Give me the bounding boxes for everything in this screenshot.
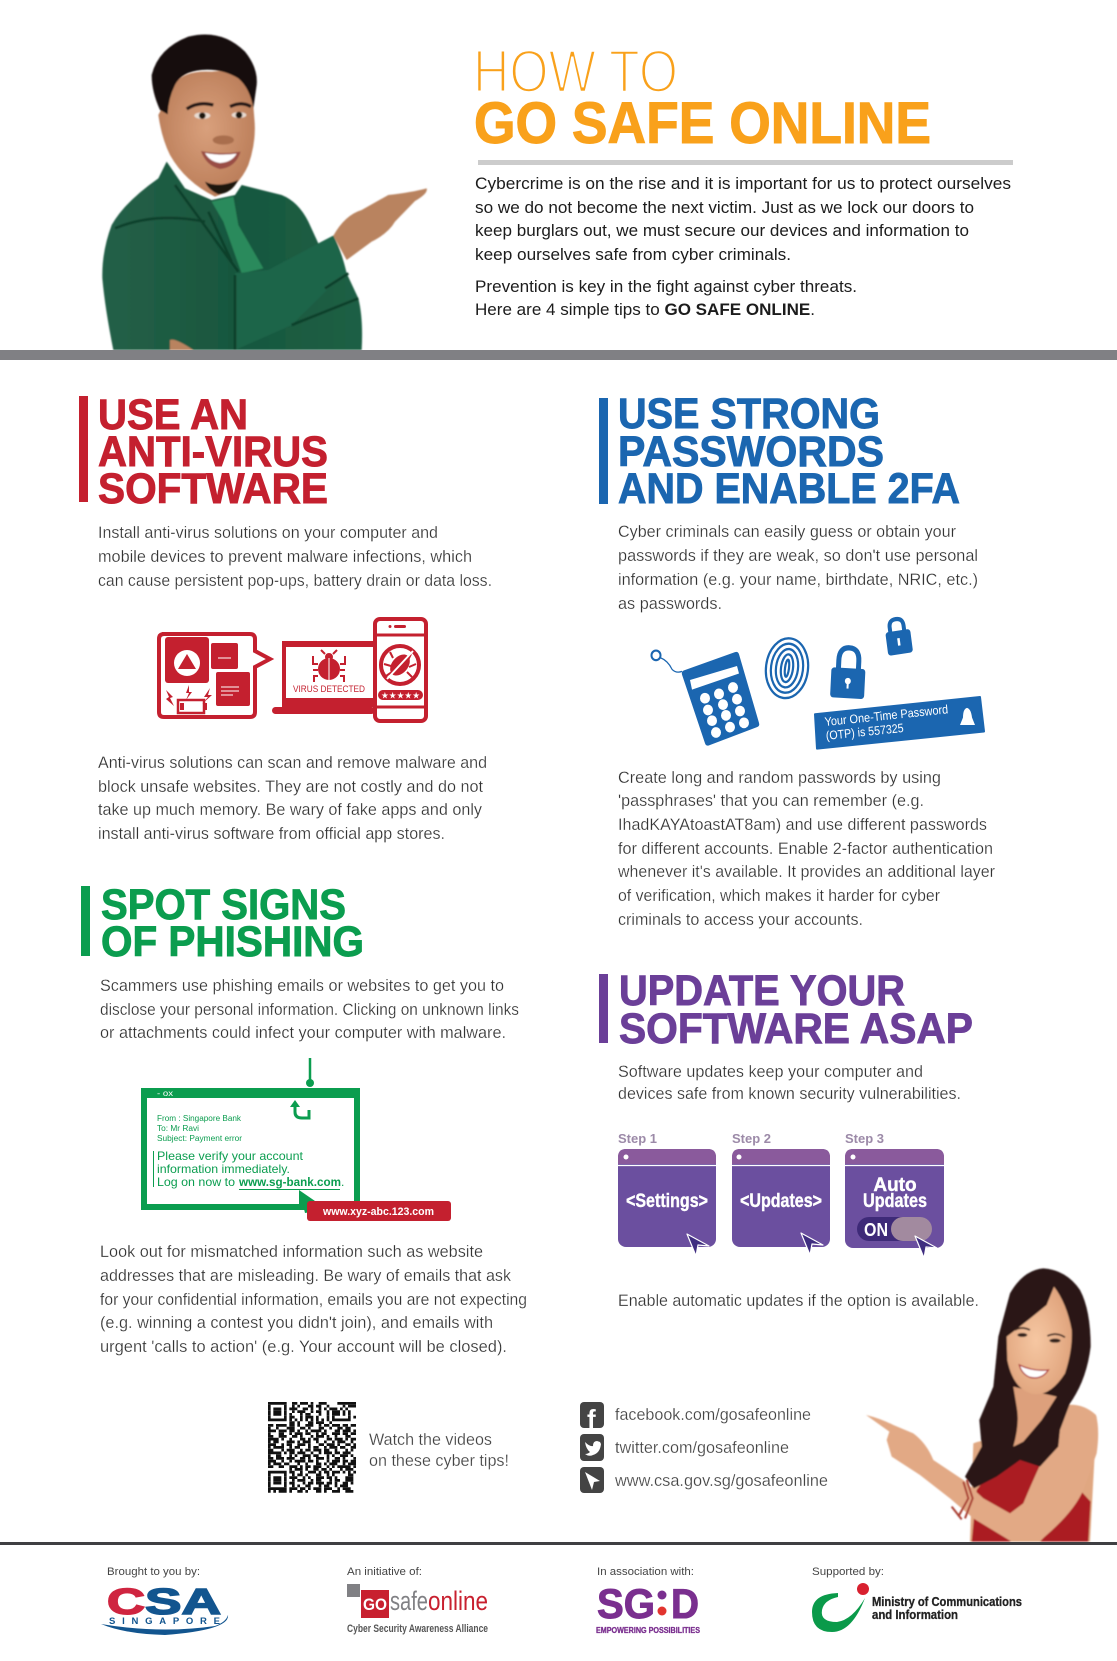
illustration: phishing email window: www.sg-bank.com <box>238 1175 341 1189</box>
footer logo: Ministry of Communications and Information <box>812 1566 1022 1632</box>
text: anti-virus details: take up much memory. Be wary of fake apps and only <box>98 801 483 819</box>
illustration: phishing email window <box>141 1058 451 1221</box>
text: anti-virus intro: Install anti-virus solutions on your computer and <box>98 524 438 542</box>
text: passwords intro: information (e.g. your name, birthdate, NRIC, etc.) <box>618 571 978 589</box>
illustration: phishing email window: To: Mr Ravi <box>157 1124 199 1133</box>
footer logo: CSA Singapore: SA <box>145 1581 221 1622</box>
text: update intro <box>618 1063 961 1103</box>
footer logo: SG:D: SG <box>597 1580 655 1627</box>
text: phishing details: addresses that are misleading. Be wary of emails that ask <box>100 1267 512 1285</box>
heading: use an anti-virus software: USE AN <box>98 391 248 439</box>
intro text: so we do not become the next victim. Just as we lock our doors to <box>475 199 974 217</box>
text: passwords details: whenever it's available. It provides an additional layer <box>617 863 995 881</box>
panel: anti-virus <box>79 391 492 843</box>
text: phishing intro <box>100 977 519 1042</box>
step 1 window: <Settings> <box>626 1191 708 1212</box>
text: social links <box>614 1406 828 1490</box>
heading: use strong passwords and enable 2FA: AND ENABLE 2FA <box>618 465 960 513</box>
title: HOW TO <box>473 38 678 105</box>
intro text: keep burglars out, we must secure our devices and information to <box>475 222 969 240</box>
icon: large padlock <box>830 647 866 699</box>
footer logo: CSA Singapore <box>101 1566 228 1635</box>
text: phishing intro: or attachments could infect your computer with malware. <box>100 1024 506 1042</box>
panel: update software <box>599 967 979 1310</box>
text: anti-virus details <box>98 754 487 843</box>
step 3 window with auto updates toggle <box>845 1131 944 1258</box>
heading: spot signs of phishing: OF PHISHING <box>101 918 364 966</box>
footer logo: SG:D: D <box>671 1580 699 1627</box>
footer logo: Ministry of Communications and Information: Ministry of Communications <box>872 1594 1022 1609</box>
step 2 window <box>732 1131 830 1255</box>
footer logo: Go Safe Online: Cyber Security Awareness Alliance <box>347 1623 488 1635</box>
illustration: phishing email window: Subject: Payment error <box>157 1134 242 1143</box>
footer logo: Go Safe Online: GO <box>363 1595 387 1614</box>
text: anti-virus details: install anti-virus software from official app stores. <box>98 825 445 843</box>
text: anti-virus details: block unsafe websites. They are not costly and do not <box>98 778 483 796</box>
text: update intro: devices safe from known security vulnerabilities. <box>618 1085 961 1103</box>
icon: one-time password message: (OTP) is 557325 <box>825 721 904 743</box>
footer logo: CSA Singapore: Brought to you by: <box>107 1566 200 1578</box>
text: phishing details: urgent 'calls to action' (e.g. Your account will be closed). <box>100 1338 507 1356</box>
icon: laptop virus detected: VIRUS DETECTED <box>293 684 365 694</box>
QR code <box>268 1403 356 1491</box>
callout: fake url: www.xyz-abc.123.com <box>322 1206 434 1218</box>
text: phishing intro: disclose your personal information. Clicking on unknown links <box>100 1001 519 1019</box>
text: phishing intro: Scammers use phishing emails or websites to get you to <box>100 977 504 995</box>
intro text: keep ourselves safe from cyber criminals. <box>475 246 791 264</box>
text: passwords details: criminals to access your accounts. <box>618 911 863 929</box>
icon: website cursor <box>580 1467 604 1493</box>
illustration: phishing email window: . <box>341 1175 344 1189</box>
illustration: phishing email window: - ox <box>157 1089 173 1098</box>
icon: malware symptoms speech bubble <box>159 634 270 717</box>
icon: phone with crossed bug <box>375 619 426 721</box>
footer logo: Go Safe Online: An initiative of: <box>347 1566 422 1578</box>
step 3 window with auto updates toggle: ON <box>864 1220 888 1240</box>
text: watch the videos: on these cyber tips! <box>369 1451 509 1470</box>
text: passwords details: 'passphrases' that you can remember (e.g. <box>618 792 924 810</box>
text: passwords details: IhadKAYAtoastAT8am) and use different passwords <box>618 816 987 834</box>
text: phishing details <box>100 1243 527 1356</box>
intro text: Here are 4 simple tips to GO SAFE ONLINE . <box>475 301 815 319</box>
heading: spot signs of phishing <box>101 881 364 966</box>
heading: use strong passwords and enable 2FA <box>618 390 960 513</box>
text: passwords details: Create long and random passwords by using <box>618 769 941 787</box>
step 3 window with auto updates toggle: Updates <box>863 1191 927 1212</box>
text: passwords intro: Cyber criminals can easily guess or obtain your <box>618 523 956 541</box>
text: anti-virus intro <box>98 524 492 590</box>
heading: update your software asap: UPDATE YOUR <box>619 967 905 1015</box>
footer logo: Ministry of Communications and Information: and Information <box>872 1607 958 1622</box>
text: enable automatic updates: Enable automatic updates if the option is available. <box>618 1292 979 1310</box>
text: anti-virus details: Anti-virus solutions can scan and remove malware and <box>98 754 487 772</box>
text: passwords intro: as passwords. <box>618 595 722 613</box>
text: watch the videos: Watch the videos <box>369 1430 492 1449</box>
footer logo: SG:D: EMPOWERING POSSIBILITIES <box>596 1626 701 1635</box>
heading: update your software asap <box>619 967 973 1053</box>
icon: twitter <box>580 1434 604 1461</box>
heading: use an anti-virus software <box>98 391 328 513</box>
footer logo: SG:D: In association with: <box>597 1566 694 1578</box>
callout: fake url <box>307 1201 451 1221</box>
icon: one-time password message: Your One-Time Password <box>824 702 949 729</box>
illustration: phishing email window: Please verify your account <box>157 1149 304 1163</box>
heading: update your software asap: SOFTWARE ASAP <box>619 1005 973 1053</box>
text: watch the videos <box>369 1430 509 1470</box>
step 3 window with auto updates toggle: Step 3 <box>845 1131 884 1146</box>
footer logo: CSA Singapore: C <box>107 1581 145 1622</box>
heading: use an anti-virus software: SOFTWARE <box>98 465 328 513</box>
footer logo: Go Safe Online: safe <box>390 1586 428 1616</box>
text: passwords details: for different accounts. Enable 2-factor authentication <box>618 840 993 858</box>
text: anti-virus intro: mobile devices to prevent malware infections, which <box>98 548 472 566</box>
step 1 window <box>618 1131 716 1256</box>
text: passwords intro <box>618 523 978 613</box>
icon: phone with crossed bug: ★★★★★ <box>381 690 420 700</box>
text: phishing details: for your confidential information, emails you are not expecting <box>100 1291 527 1309</box>
panel: phishing <box>81 881 527 1356</box>
text: passwords details <box>617 769 995 929</box>
heading: spot signs of phishing: SPOT SIGNS <box>101 881 346 929</box>
text: passwords details: of verification, which makes it harder for cyber <box>618 887 940 905</box>
text: phishing details: Look out for mismatched information such as website <box>100 1243 483 1261</box>
icon: fingerprint <box>762 635 812 701</box>
text: anti-virus intro: can cause persistent pop-ups, battery drain or data loss. <box>98 572 492 590</box>
step 3 window with auto updates toggle: Auto <box>873 1175 917 1196</box>
icon: facebook: f <box>587 1404 596 1434</box>
step 2 window: Step 2 <box>732 1131 771 1146</box>
icon: facebook <box>580 1402 604 1434</box>
icon: one-time password message <box>815 697 984 749</box>
icon: small padlock <box>884 617 913 656</box>
footer logo: SG:D <box>596 1566 701 1635</box>
text: social links: facebook.com/gosafeonline <box>615 1406 811 1424</box>
step 1 window: Step 1 <box>618 1131 657 1146</box>
intro text: Cybercrime is on the rise and it is important for us to protect ourselves <box>475 175 1011 193</box>
panel: passwords and 2FA <box>599 390 995 929</box>
icon: security token <box>652 651 759 746</box>
text: social links: twitter.com/gosafeonline <box>615 1439 789 1457</box>
title <box>473 38 931 156</box>
footer logo: Go Safe Online: online <box>428 1586 488 1616</box>
text: update intro: Software updates keep your computer and <box>618 1063 923 1081</box>
intro text: Prevention is key in the fight against cyber threats. <box>475 278 857 296</box>
footer logo: Go Safe Online <box>347 1566 488 1635</box>
text: phishing details: (e.g. winning a contest you didn't join), and emails with <box>100 1314 493 1332</box>
intro text <box>475 175 1011 319</box>
heading: use strong passwords and enable 2FA: PASSWORDS <box>618 428 884 476</box>
illustration: man in green shirt presenting <box>102 34 427 350</box>
heading: use an anti-virus software: ANTI-VIRUS <box>98 428 328 476</box>
illustration: woman in red dress pointing <box>866 1268 1098 1542</box>
title: GO SAFE ONLINE <box>474 91 931 156</box>
illustration: phishing email window: Log on now to <box>157 1175 235 1189</box>
footer logo: Ministry of Communications and Information: Supported by: <box>812 1566 884 1578</box>
footer logo: CSA Singapore: SINGAPORE <box>109 1616 220 1627</box>
icon: laptop virus detected <box>272 641 375 714</box>
heading: use strong passwords and enable 2FA: USE STRONG <box>618 390 880 438</box>
illustration: phishing email window: From : Singapore Bank <box>157 1114 242 1123</box>
text: social links: www.csa.gov.sg/gosafeonline <box>614 1472 828 1490</box>
text: passwords intro: passwords if they are weak, so don't use personal <box>618 547 978 565</box>
illustration: phishing email window: information immediately. <box>157 1162 290 1176</box>
step 2 window: <Updates> <box>740 1191 822 1212</box>
